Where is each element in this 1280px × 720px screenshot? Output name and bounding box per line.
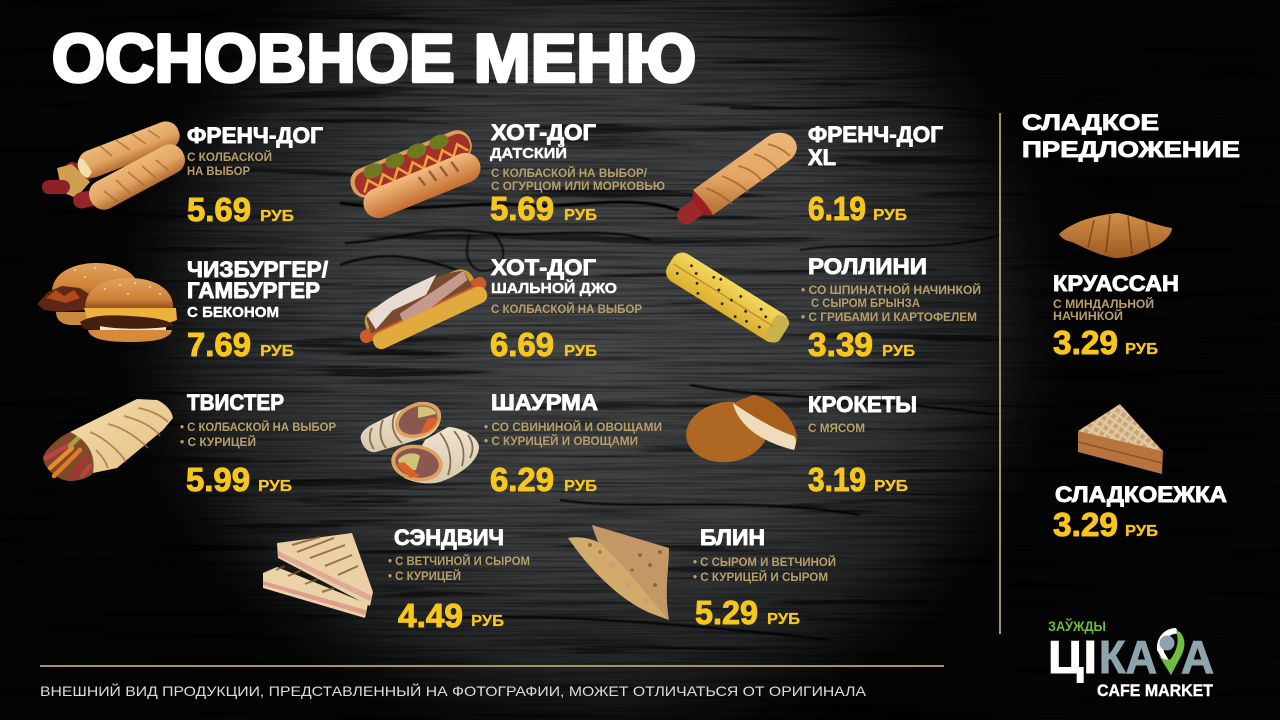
price [1053, 506, 1158, 543]
description: • С СЫРОМ И ВЕТЧИНОЙ [693, 556, 836, 569]
menu item: хот-дог датский [345, 120, 665, 227]
description: С МИНДАЛЬНОЙ [1053, 298, 1154, 311]
icon: twister [43, 399, 173, 481]
name: РОЛЛИНИ [808, 254, 927, 279]
menu item: френч-дог [42, 118, 324, 228]
icon: french dog xl [674, 133, 797, 228]
description [484, 421, 662, 448]
icon: shawarma [361, 395, 479, 485]
description: • С ВЕТЧИНОЙ И СЫРОМ [388, 555, 530, 568]
price: 5.29 [695, 594, 758, 631]
name: XL [808, 145, 836, 170]
vertical divider [999, 113, 1001, 634]
heading: ПРЕДЛОЖЕНИЕ [1022, 137, 1240, 162]
icon: french dog [42, 118, 190, 215]
price: 3.19 [808, 461, 866, 498]
price [490, 190, 597, 227]
icon: rollini [662, 248, 792, 347]
price: РУБ [1125, 341, 1158, 358]
description [801, 284, 981, 324]
price: РУБ [471, 613, 504, 630]
icon: hot dog with bacon [349, 257, 493, 356]
description: • С КУРИЦЕЙ И СЫРОМ [693, 571, 828, 584]
price: РУБ [767, 611, 800, 628]
price: РУБ [260, 343, 294, 360]
description [693, 556, 836, 584]
menu item: твистер [43, 390, 336, 498]
price [187, 191, 294, 228]
description [388, 555, 530, 583]
heading: СЛАДКОЕ [1022, 110, 1159, 135]
description: • С КУРИЦЕЙ [388, 570, 461, 583]
name: КРОКЕТЫ [808, 392, 917, 417]
description: • С КОЛБАСКОЙ НА ВЫБОР [180, 421, 336, 434]
price: 3.39 [808, 326, 873, 363]
description: • С КУРИЦЕЙ И ОВОЩАМИ [484, 435, 638, 448]
description: НА ВЫБОР [187, 166, 250, 178]
name: ШАУРМА [491, 390, 598, 415]
name: ТВИСТЕР [187, 390, 284, 415]
price [808, 326, 915, 363]
description [180, 421, 336, 449]
price [808, 461, 908, 498]
name: ХОТ-ДОГ [491, 255, 597, 280]
name: ЧИЗБУРГЕР/ [187, 257, 328, 282]
price: РУБ [564, 478, 597, 495]
price: 5.69 [490, 190, 554, 227]
description: С ОГУРЦОМ ИЛИ МОРКОВЬЮ [491, 181, 665, 193]
price: 6.19 [808, 190, 866, 227]
price [1053, 324, 1158, 361]
logo [1048, 617, 1214, 700]
price [186, 461, 292, 498]
menu item: сэндвич [263, 525, 530, 634]
description: С КОЛБАСКОЙ НА ВЫБОР/ [491, 167, 648, 180]
title: ОСНОВНОЕ МЕНЮ [52, 20, 696, 96]
description: С БЕКОНОМ [187, 305, 279, 321]
price: 6.29 [490, 461, 554, 498]
price: 3.29 [1053, 324, 1118, 361]
description [1053, 298, 1154, 323]
name: СЛАДКОЕЖКА [1055, 482, 1227, 507]
menu item: френч-дог xl [674, 122, 944, 228]
price [808, 190, 907, 227]
description: • С ГРИБАМИ И КАРТОФЕЛЕМ [801, 312, 977, 324]
name: ХОТ-ДОГ [491, 120, 597, 145]
menu item: шаурма [361, 390, 662, 498]
price: РУБ [564, 207, 597, 224]
price: 7.69 [187, 326, 251, 363]
menu item: чизбургер [37, 257, 328, 363]
price: РУБ [873, 207, 907, 224]
sub-brand: CAFE MARKET [1097, 681, 1214, 700]
footer disclaimer: ВНЕШНИЙ ВИД ПРОДУКЦИИ, ПРЕДСТАВЛЕННЫЙ НА ФОТОГРАФИИ, МОЖЕТ ОТЛИЧАТЬСЯ ОТ ОРИГИНАЛА [40, 682, 867, 699]
price: 5.69 [187, 191, 251, 228]
icon: map pin [1157, 628, 1184, 675]
icon: burger [37, 263, 177, 342]
icon: sandwich [263, 533, 373, 618]
price: РУБ [564, 343, 597, 360]
price: РУБ [1125, 523, 1158, 540]
menu item: хот-дог шальной джо [349, 255, 642, 363]
menu item: роллини [662, 248, 981, 363]
price [187, 326, 294, 363]
name: БЛИН [700, 525, 765, 550]
icon: hot dog with pickles [345, 124, 485, 224]
icon: croquettes [682, 395, 797, 467]
description: С МЯСОМ [808, 423, 865, 435]
price: 3.29 [1053, 506, 1118, 543]
price [490, 326, 597, 363]
price [398, 597, 504, 634]
name: КРУАССАН [1053, 271, 1179, 296]
price [490, 461, 597, 498]
description: С СЫРОМ БРЫНЗА [811, 298, 920, 310]
name: ФРЕНЧ-ДОГ [808, 122, 944, 147]
wordmark: А [1181, 631, 1214, 683]
panel: sweet offer [1022, 110, 1240, 543]
price [695, 594, 800, 631]
heading [1022, 110, 1240, 162]
description: С КОЛБАСКОЙ [187, 151, 272, 164]
price: РУБ [882, 343, 915, 360]
tagline: ЗАЎЖДЫ [1048, 617, 1106, 634]
price: 6.69 [490, 326, 554, 363]
icon: crepe [568, 525, 669, 620]
description: • С КУРИЦЕЙ [180, 436, 256, 449]
description: НАЧИНКОЙ [1053, 310, 1123, 323]
menu item: крокеты [682, 392, 917, 498]
name: ШАЛЬНОЙ ДЖО [491, 279, 617, 297]
name: СЭНДВИЧ [394, 525, 504, 550]
description [187, 151, 272, 178]
description [491, 167, 665, 193]
wordmark: ЦІ [1048, 631, 1097, 683]
name [187, 257, 328, 303]
wordmark [1048, 631, 1214, 683]
description: • СО СВИНИНОЙ И ОВОЩАМИ [484, 421, 662, 434]
menu item: блин [568, 525, 836, 631]
icon: croissant [1059, 213, 1172, 258]
price: 4.49 [398, 597, 463, 634]
name: ФРЕНЧ-ДОГ [187, 123, 324, 148]
name: ДАТСКИЙ [490, 144, 567, 162]
price: РУБ [258, 478, 292, 495]
price: 5.99 [186, 461, 250, 498]
description: С КОЛБАСКОЙ НА ВЫБОР [491, 303, 642, 316]
price: РУБ [260, 208, 294, 225]
name [490, 120, 597, 162]
wordmark: КА [1099, 631, 1157, 683]
name [491, 255, 617, 297]
name [808, 122, 944, 170]
name: ГАМБУРГЕР [187, 278, 320, 303]
footer rule [40, 665, 944, 667]
icon: wafer cake [1078, 404, 1163, 474]
price: РУБ [874, 478, 908, 495]
description: • СО ШПИНАТНОЙ НАЧИНКОЙ [801, 284, 981, 297]
